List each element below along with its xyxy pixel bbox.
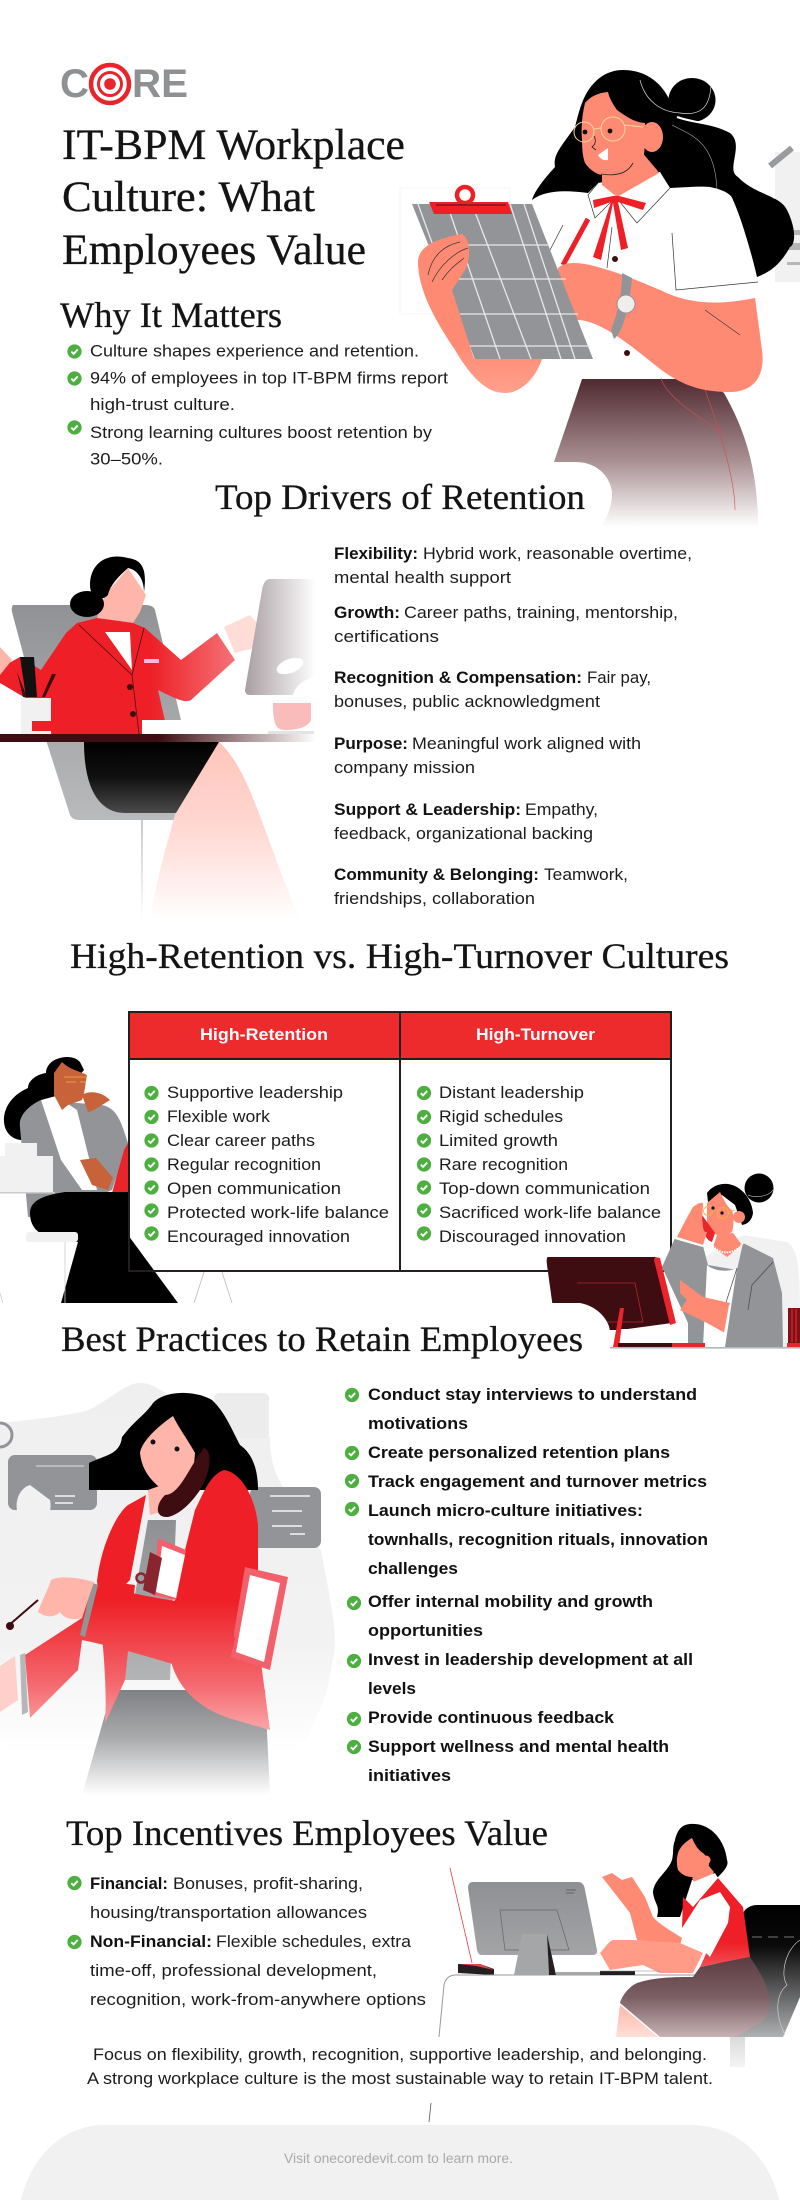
column: high-retention: Flexible work [167,1108,271,1126]
driver: support and leadership: Empathy, [525,801,598,819]
closing statement: A strong workplace culture is the most sustainable way to retain IT-BPM talent. [87,2070,713,2088]
column: high-retention: Open communication [167,1180,341,1198]
footer panel [21,2125,779,2200]
column: high-retention: Supportive leadership [167,1084,343,1102]
list: best practices: Track engagement and turnover metrics [368,1473,707,1491]
table header [129,1012,671,1059]
list: best practices: motivations [368,1415,468,1433]
column: high-retention: Regular recognition [167,1156,321,1174]
list: best practices [345,1386,708,1785]
title: Employees Value [62,227,366,274]
driver: growth [334,604,678,646]
list: incentives: housing/transportation allowances [90,1904,367,1922]
driver: flexibility [334,545,692,587]
column: high-turnover: Limited growth [439,1132,558,1150]
heading: High-Retention vs. High-Turnover Cultures: High-Retention vs. High-Turnover Cultures [70,936,729,976]
list: best practices: initiatives [368,1767,451,1785]
driver: growth: Growth: [334,604,400,622]
list: best practices: Invest in leadership development at all [368,1651,693,1669]
list: incentives: time-off, professional development, [90,1962,377,1980]
list: why it matters: 94% of employees in top IT-BPM firms report [90,370,448,388]
driver: support and leadership: Support & Leadership: [334,801,521,819]
logo: CORE: C [60,62,89,106]
table header: High-Turnover [476,1025,595,1044]
driver: support and leadership: feedback, organizational backing [334,825,593,843]
table: high-retention vs high-turnover [129,1012,671,1271]
driver: community and belonging: friendships, collaboration [334,890,535,908]
list: why it matters [67,342,448,468]
list: best practices: Support wellness and mental health [368,1738,669,1756]
column: high-retention [144,1084,389,1246]
list: best practices: opportunities [368,1622,483,1640]
title: IT-BPM Workplace [62,122,405,169]
list: best practices: levels [368,1680,416,1698]
list: why it matters: Culture shapes experience and retention. [90,342,419,360]
list: best practices: Launch micro-culture initiatives: [368,1502,643,1520]
heading: Why It Matters: Why It Matters [60,295,282,335]
figure: woman at desk [0,557,316,920]
column: high-turnover: Distant leadership [439,1084,584,1102]
column: high-turnover: Rigid schedules [439,1108,563,1126]
heading: Best Practices to Retain Employees: Best Practices to Retain Employees [61,1319,583,1359]
column: high-retention: Clear career paths [167,1132,315,1150]
list: incentives [67,1875,426,2009]
footer text: Visit onecoredevit.com to learn more. [284,2150,513,2166]
title: Culture: What [62,174,315,221]
logo: CORE: RE [132,62,188,106]
list: incentives: Non-Financial: [90,1933,212,1951]
driver: community and belonging [334,866,628,908]
driver: recognition and compensation [334,669,651,711]
driver: support and leadership [334,801,598,843]
column: high-turnover: Sacrificed work-life balance [439,1204,661,1222]
list: incentives: Bonuses, profit-sharing, [173,1875,363,1893]
column: high-turnover: Top-down communication [439,1180,650,1198]
list: best practices: Offer internal mobility and growth [368,1593,653,1611]
column: high-retention: Protected work-life balance [167,1204,389,1222]
list: why it matters: 30–50%. [90,450,163,468]
list: best practices: challenges [368,1560,458,1578]
list: best practices: Conduct stay interviews to understand [368,1386,697,1404]
list: top drivers of retention [334,545,692,908]
column: high-retention: Encouraged innovation [167,1228,350,1246]
figure: woman holding clipboard [400,70,800,527]
white cutout behind heading [0,462,612,535]
driver: recognition and compensation: Recognition & Compensation: [334,669,582,687]
figure: woman at computer [439,1824,800,2067]
list: why it matters: high-trust culture. [90,396,235,414]
list: incentives: Flexible schedules, extra [216,1933,412,1951]
closing statement [87,2046,713,2088]
driver: flexibility: mental health support [334,569,511,587]
figure: woman with documents on phone [0,1383,335,1795]
driver: flexibility: Flexibility: [334,545,418,563]
driver: purpose: company mission [334,759,475,777]
title [62,122,405,274]
list: best practices: townhalls, recognition rituals, innovation [368,1531,708,1549]
driver: growth: Career paths, training, mentorship, [404,604,678,622]
driver: purpose [334,735,641,777]
figure: woman on phone at monitor [547,1174,800,1349]
driver: community and belonging: Community & Belonging: [334,866,539,884]
driver: purpose: Meaningful work aligned with [412,735,641,753]
column: high-turnover [417,1084,661,1246]
list: why it matters: Strong learning cultures boost retention by [90,424,433,442]
list: incentives: Financial: [90,1875,168,1893]
column: high-turnover: Rare recognition [439,1156,568,1174]
driver: flexibility: Hybrid work, reasonable overtime, [423,545,692,563]
list: best practices: Create personalized retention plans [368,1444,670,1462]
closing statement: Focus on flexibility, growth, recognition, supportive leadership, and belonging. [93,2046,707,2064]
logo: CORE [60,62,188,106]
heading: Top Drivers of Retention: Top Drivers of Retention [215,477,585,517]
driver: recognition and compensation: Fair pay, [587,669,651,687]
driver: community and belonging: Teamwork, [544,866,628,884]
column: high-turnover: Discouraged innovation [439,1228,626,1246]
list: incentives: recognition, work-from-anywhere options [90,1991,426,2009]
list: best practices: Provide continuous feedback [368,1709,615,1727]
driver: purpose: Purpose: [334,735,408,753]
white cutout behind heading [0,1303,610,1380]
driver: growth: certifications [334,628,439,646]
figure: seated woman on the left [0,1057,232,1345]
heading: Top Incentives Employees Value: Top Incentives Employees Value [66,1813,548,1853]
table header: High-Retention [200,1025,328,1044]
driver: recognition and compensation: bonuses, public acknowledgment [334,693,600,711]
